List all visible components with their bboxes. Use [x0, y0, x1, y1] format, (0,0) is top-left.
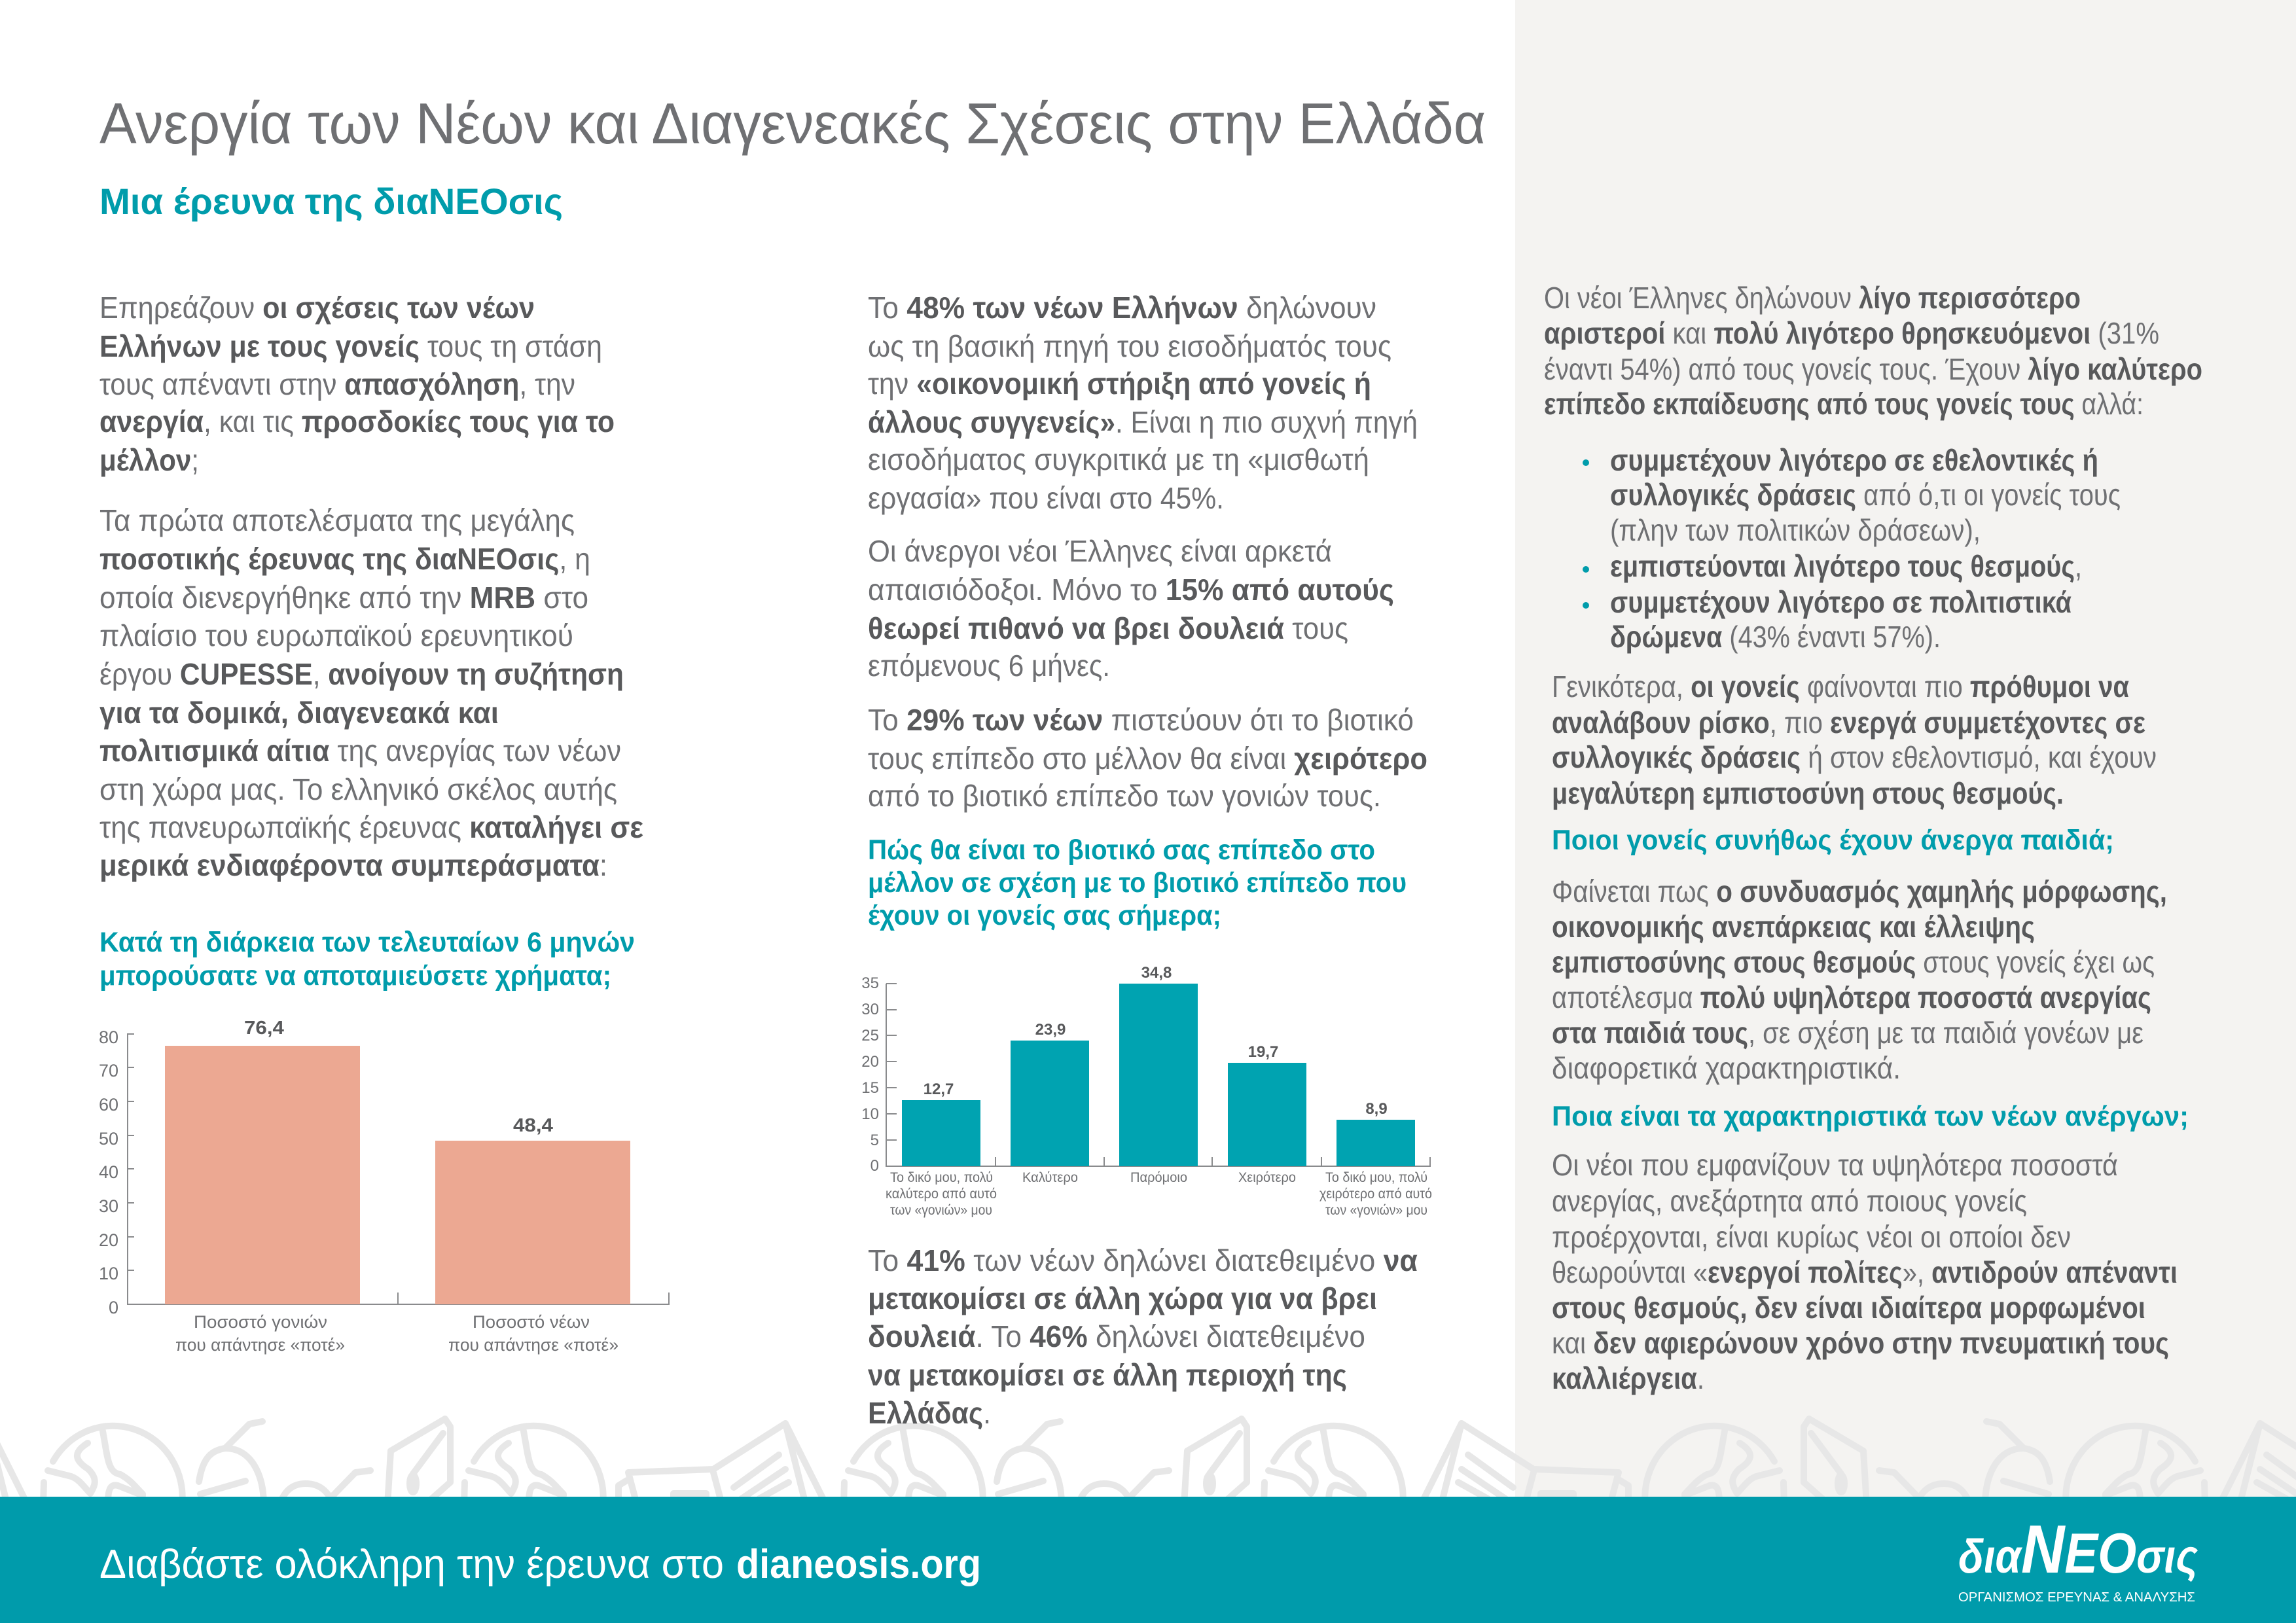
text block: column 3 characteristics of unemployed: θεωρούνται «ενεργοί πολίτες», αντιδρούν απέναντι [1552, 1255, 2178, 1289]
text block: column 2 income source: εργασία» που είναι στο 45%. [868, 481, 1224, 515]
text block: column 1 intro question: Ελλήνων με τους γονείς τους τη στάση [99, 329, 602, 363]
bar chart: living standard: των «γονιών» μου [1325, 1203, 1427, 1218]
text block: column 3 parents with unemployed children: εμπιστοσύνης στους θεσμούς στους γονείς έχει ως [1552, 945, 2155, 979]
text block: column 3 intro [1544, 281, 2202, 421]
bar chart: savings: 0 [109, 1298, 118, 1317]
bar chart: living standard: χειρότερο από αυτό [1319, 1186, 1432, 1202]
text block: column 3 parents with unemployed children: διαφορετικά χαρακτηριστικά. [1552, 1051, 1901, 1085]
bullet list: συμμετέχουν λιγότερο σε πολιτιστικά [1610, 585, 2072, 619]
text block: column 2 migration: να μετακομίσει σε άλλη περιοχή της [868, 1358, 1347, 1392]
text block: column 2 income source [868, 291, 1418, 515]
bar chart: savings: που απάντησε «ποτέ» [175, 1335, 345, 1355]
bar chart: savings [99, 1018, 669, 1355]
bar chart: living standard: 15 [861, 1079, 879, 1097]
footer band: dianeosis.org [736, 1542, 981, 1587]
bar chart: living standard: 23,9 [1035, 1021, 1066, 1039]
text block: column 1 intro question: Επηρεάζουν οι σχέσεις των νέων [99, 291, 535, 325]
text block: column 3 characteristics of unemployed: στους θεσμούς, δεν είναι ιδιαίτερα μορφωμένοι [1552, 1291, 2145, 1325]
text block: column 2 unemployed pessimism: απαισιόδοξοι. Μόνο το 15% από αυτούς [868, 573, 1394, 607]
text block: column 1 survey results: οποία διενεργήθηκε από την MRB στο [99, 580, 588, 615]
footer band: Διαβάστε ολόκληρη την έρευνα στο [99, 1542, 724, 1587]
bar chart: living standard: 25 [861, 1027, 879, 1044]
text block: column 1 survey results: της πανευρωπαϊκής έρευνας καταλήγει σε [99, 810, 643, 844]
text block: column 1 survey results: ποσοτικής έρευνας της διαΝΕΟσις, η [99, 542, 590, 576]
text block: column 2 migration: Ελλάδας. [868, 1396, 991, 1430]
text block: column 3 parents: αναλάβουν ρίσκο, πιο ενεργά συμμετέχοντες σε [1552, 705, 2145, 740]
text block: column 3 parents: μεγαλύτερη εμπιστοσύνη στους θεσμούς. [1552, 776, 2064, 810]
text block: column 2 living standard: Το 29% των νέων πιστεύουν ότι το βιοτικό [868, 703, 1414, 737]
text block: column 2 income source: την «οικονομική στήριξη από γονείς ή [868, 366, 1371, 401]
bar chart: savings: 70 [99, 1061, 118, 1080]
bar chart: savings: 10 [99, 1264, 118, 1283]
bar chart: living standard: Καλύτερο [1022, 1170, 1078, 1185]
bar chart: savings: 20 [99, 1230, 118, 1250]
bar chart: living standard: 10 [861, 1105, 879, 1123]
bar chart: savings: Ποσοστό νέων [473, 1312, 590, 1332]
bar chart: living standard: 30 [861, 1001, 879, 1018]
bar chart: living standard: Χειρότερο [1238, 1170, 1296, 1185]
footer band [0, 1497, 2296, 1623]
heading: living standard chart question: έχουν οι γονείς σας σήμερα; [868, 900, 1221, 931]
text block: column 3 parents: συλλογικές δράσεις ή στον εθελοντισμό, και έχουν [1552, 740, 2157, 774]
bar chart: living standard: Το δικό μου, πολύ [1325, 1170, 1427, 1185]
text block: column 2 income source: άλλους συγγενείς». Είναι η πιο συχνή πηγή [868, 405, 1418, 439]
text block: column 1 intro question: τους απέναντι στην απασχόληση, την [99, 367, 575, 401]
text block: column 3 parents [1552, 669, 2157, 810]
bar chart: savings: 50 [99, 1129, 118, 1149]
bar chart: living standard: Παρόμοιο [1130, 1170, 1187, 1185]
bar chart: living standard: 5 [870, 1132, 879, 1149]
bar chart: savings: 60 [99, 1095, 118, 1115]
text block: column 2 migration: μετακομίσει σε άλλη χώρα για να βρει [868, 1281, 1377, 1315]
text block: column 3 intro: επίπεδο εκπαίδευσης από τους γονείς τους αλλά: [1544, 387, 2144, 421]
text block: column 2 unemployed pessimism: Οι άνεργοι νέοι Έλληνες είναι αρκετά [868, 534, 1332, 568]
text block: column 3 characteristics of unemployed: προέρχονται, είναι κυρίως νέοι οι οποίοι δεν [1552, 1220, 2071, 1254]
bar chart: savings: 80 [99, 1027, 118, 1047]
text block: column 3 intro: αριστεροί και πολύ λιγότερο θρησκευόμενοι (31% [1544, 316, 2159, 350]
text block: column 3 parents with unemployed children: στα παιδιά τους, σε σχέση με τα παιδιά γονέων με [1552, 1016, 2144, 1050]
bar chart: savings: 30 [99, 1196, 118, 1216]
bullet list: συμμετέχουν λιγότερο σε εθελοντικές ή [1610, 443, 2098, 477]
text block: column 1 survey results: για τα δομικά, διαγενεακά και [99, 696, 499, 730]
bar chart: living standard: Το δικό μου, πολύ [890, 1170, 993, 1185]
text block: column 2 unemployed pessimism: επόμενους 6 μήνες. [868, 649, 1110, 683]
text block: column 1 survey results: Τα πρώτα αποτελέσματα της μεγάλης [99, 503, 575, 537]
text block: column 3 parents with unemployed children: οικονομικής ανεπάρκειας και έλλειψης [1552, 910, 2035, 944]
text block: column 3 characteristics of unemployed: Οι νέοι που εμφανίζουν τα υψηλότερα ποσοστά [1552, 1148, 2118, 1182]
text block: column 1 survey results: μερικά ενδιαφέροντα συμπεράσματα: [99, 848, 607, 882]
bullet list [1583, 443, 2121, 654]
text block: column 2 living standard: από το βιοτικό επίπεδο των γονιών τους. [868, 779, 1381, 813]
subtitle: Μια έρευνα της διαΝΕΟσις [99, 181, 563, 222]
bar chart: living standard: 12,7 [924, 1080, 954, 1098]
heading: characteristics: Ποια είναι τα χαρακτηριστικά των νέων ανέργων; [1552, 1101, 2189, 1132]
text block: column 2 unemployed pessimism [868, 534, 1394, 683]
panel: grey right column background [1515, 0, 2296, 1499]
heading: living standard chart question: Πώς θα είναι το βιοτικό σας επίπεδο στο [868, 834, 1375, 866]
text block: column 3 intro: Οι νέοι Έλληνες δηλώνουν λίγο περισσότερο [1544, 281, 2081, 315]
text block: column 3 characteristics of unemployed: ανεργίας, ανεξάρτητα από ποιους γονείς [1552, 1184, 2027, 1218]
text block: column 2 income source: ως τη βασική πηγή του εισοδήματός τους [868, 329, 1391, 363]
text block: column 3 parents with unemployed children [1552, 874, 2167, 1085]
bar chart: savings: 40 [99, 1162, 118, 1182]
text block: column 3 intro: έναντι 54%) από τους γονείς τους. Έχουν λίγο καλύτερο [1544, 352, 2202, 386]
bullet list: δρώμενα (43% έναντι 57%). [1610, 620, 1941, 654]
text block: column 1 intro question: ανεργία, και τις προσδοκίες τους για το [99, 404, 615, 438]
text block: column 1 survey results [99, 503, 643, 882]
bar chart: living standard: 0 [870, 1157, 879, 1175]
text block: column 2 migration [868, 1243, 1418, 1430]
text block: column 3 parents: Γενικότερα, οι γονείς φαίνονται πιο πρόθυμοι να [1552, 669, 2129, 704]
bar chart: living standard [861, 964, 1432, 1218]
heading: living standard chart question: μέλλον σε σχέση με το βιοτικό επίπεδο που [868, 867, 1407, 899]
bar chart: living standard: των «γονιών» μου [890, 1203, 992, 1218]
heading: which parents: Ποιοι γονείς συνήθως έχουν άνεργα παιδιά; [1552, 825, 2114, 856]
heading: savings chart question: μπορούσατε να αποταμιεύσετε χρήματα; [99, 960, 611, 991]
text block: column 3 characteristics of unemployed: και δεν αφιερώνουν χρόνο στην πνευματική τους [1552, 1326, 2169, 1360]
heading: savings chart question: Κατά τη διάρκεια των τελευταίων 6 μηνών [99, 927, 635, 958]
bar chart: savings: 76,4 [244, 1018, 284, 1039]
bar chart: living standard: 8,9 [1365, 1100, 1388, 1118]
text block: column 2 living standard [868, 703, 1427, 813]
text block: column 3 characteristics of unemployed: καλλιέργεια. [1552, 1361, 1704, 1395]
text block: column 2 migration: δουλειά. Το 46% δηλώνει διατεθειμένο [868, 1319, 1365, 1353]
text block: column 2 income source: εισοδήματος συγκριτικά με τη «μισθωτή [868, 442, 1369, 476]
bar chart: savings: που απάντησε «ποτέ» [448, 1335, 619, 1355]
bullet list: συλλογικές δράσεις από ό,τι οι γονείς τους [1610, 478, 2121, 512]
text block: column 1 intro question: μέλλον; [99, 443, 199, 477]
text block: column 3 characteristics of unemployed [1552, 1148, 2178, 1395]
decorative icon pattern above footer [0, 1419, 2296, 1505]
text block: column 2 unemployed pessimism: θεωρεί πιθανό να βρει δουλειά τους [868, 611, 1348, 645]
text block: column 1 survey results: στη χώρα μας. Το ελληνικό σκέλος αυτής [99, 772, 617, 806]
bar chart: savings: Ποσοστό γονιών [194, 1312, 327, 1332]
bullet list: εμπιστεύονται λιγότερο τους θεσμούς, [1610, 549, 2082, 583]
text block: column 3 parents with unemployed children: αποτέλεσμα πολύ υψηλότερα ποσοστά ανεργίας [1552, 980, 2151, 1014]
bar chart: living standard: 35 [861, 974, 879, 992]
bar chart: living standard: 19,7 [1248, 1043, 1278, 1061]
bullet list: (πλην των πολιτικών δράσεων), [1610, 513, 1981, 547]
text block: column 3 parents with unemployed children: Φαίνεται πως ο συνδυασμός χαμηλής μόρφωσης, [1552, 874, 2167, 908]
title: Ανεργία των Νέων και Διαγενεακές Σχέσεις στην Ελλάδα [99, 91, 1486, 156]
text block: column 1 survey results: πλαίσιο του ευρωπαϊκού ερευνητικού [99, 618, 573, 652]
bar chart: living standard: καλύτερο από αυτό [886, 1186, 997, 1202]
text block: column 2 living standard: τους επίπεδο στο μέλλον θα είναι χειρότερο [868, 741, 1427, 776]
bar chart: living standard: 34,8 [1141, 964, 1172, 982]
bar chart: living standard: 20 [861, 1053, 879, 1071]
logo: διαΝΕΟσις: διαΝΕΟσις [1958, 1512, 2198, 1588]
bar chart: savings: 48,4 [513, 1115, 553, 1136]
text block: column 2 income source: Το 48% των νέων Ελλήνων δηλώνουν [868, 291, 1376, 325]
heading: savings chart question [99, 927, 635, 991]
text block: column 1 survey results: πολιτισμικά αίτια της ανεργίας των νέων [99, 734, 621, 768]
heading: living standard chart question [868, 834, 1407, 931]
logo: διαΝΕΟσις: ΟΡΓΑΝΙΣΜΟΣ ΕΡΕΥΝΑΣ & ΑΝΑΛΥΣΗΣ [1958, 1590, 2195, 1605]
text block: column 1 survey results: έργου CUPESSE, ανοίγουν τη συζήτηση [99, 657, 624, 691]
text block: column 2 migration: Το 41% των νέων δηλώνει διατεθειμένο να [868, 1243, 1418, 1277]
text block: column 1 intro question [99, 291, 615, 477]
